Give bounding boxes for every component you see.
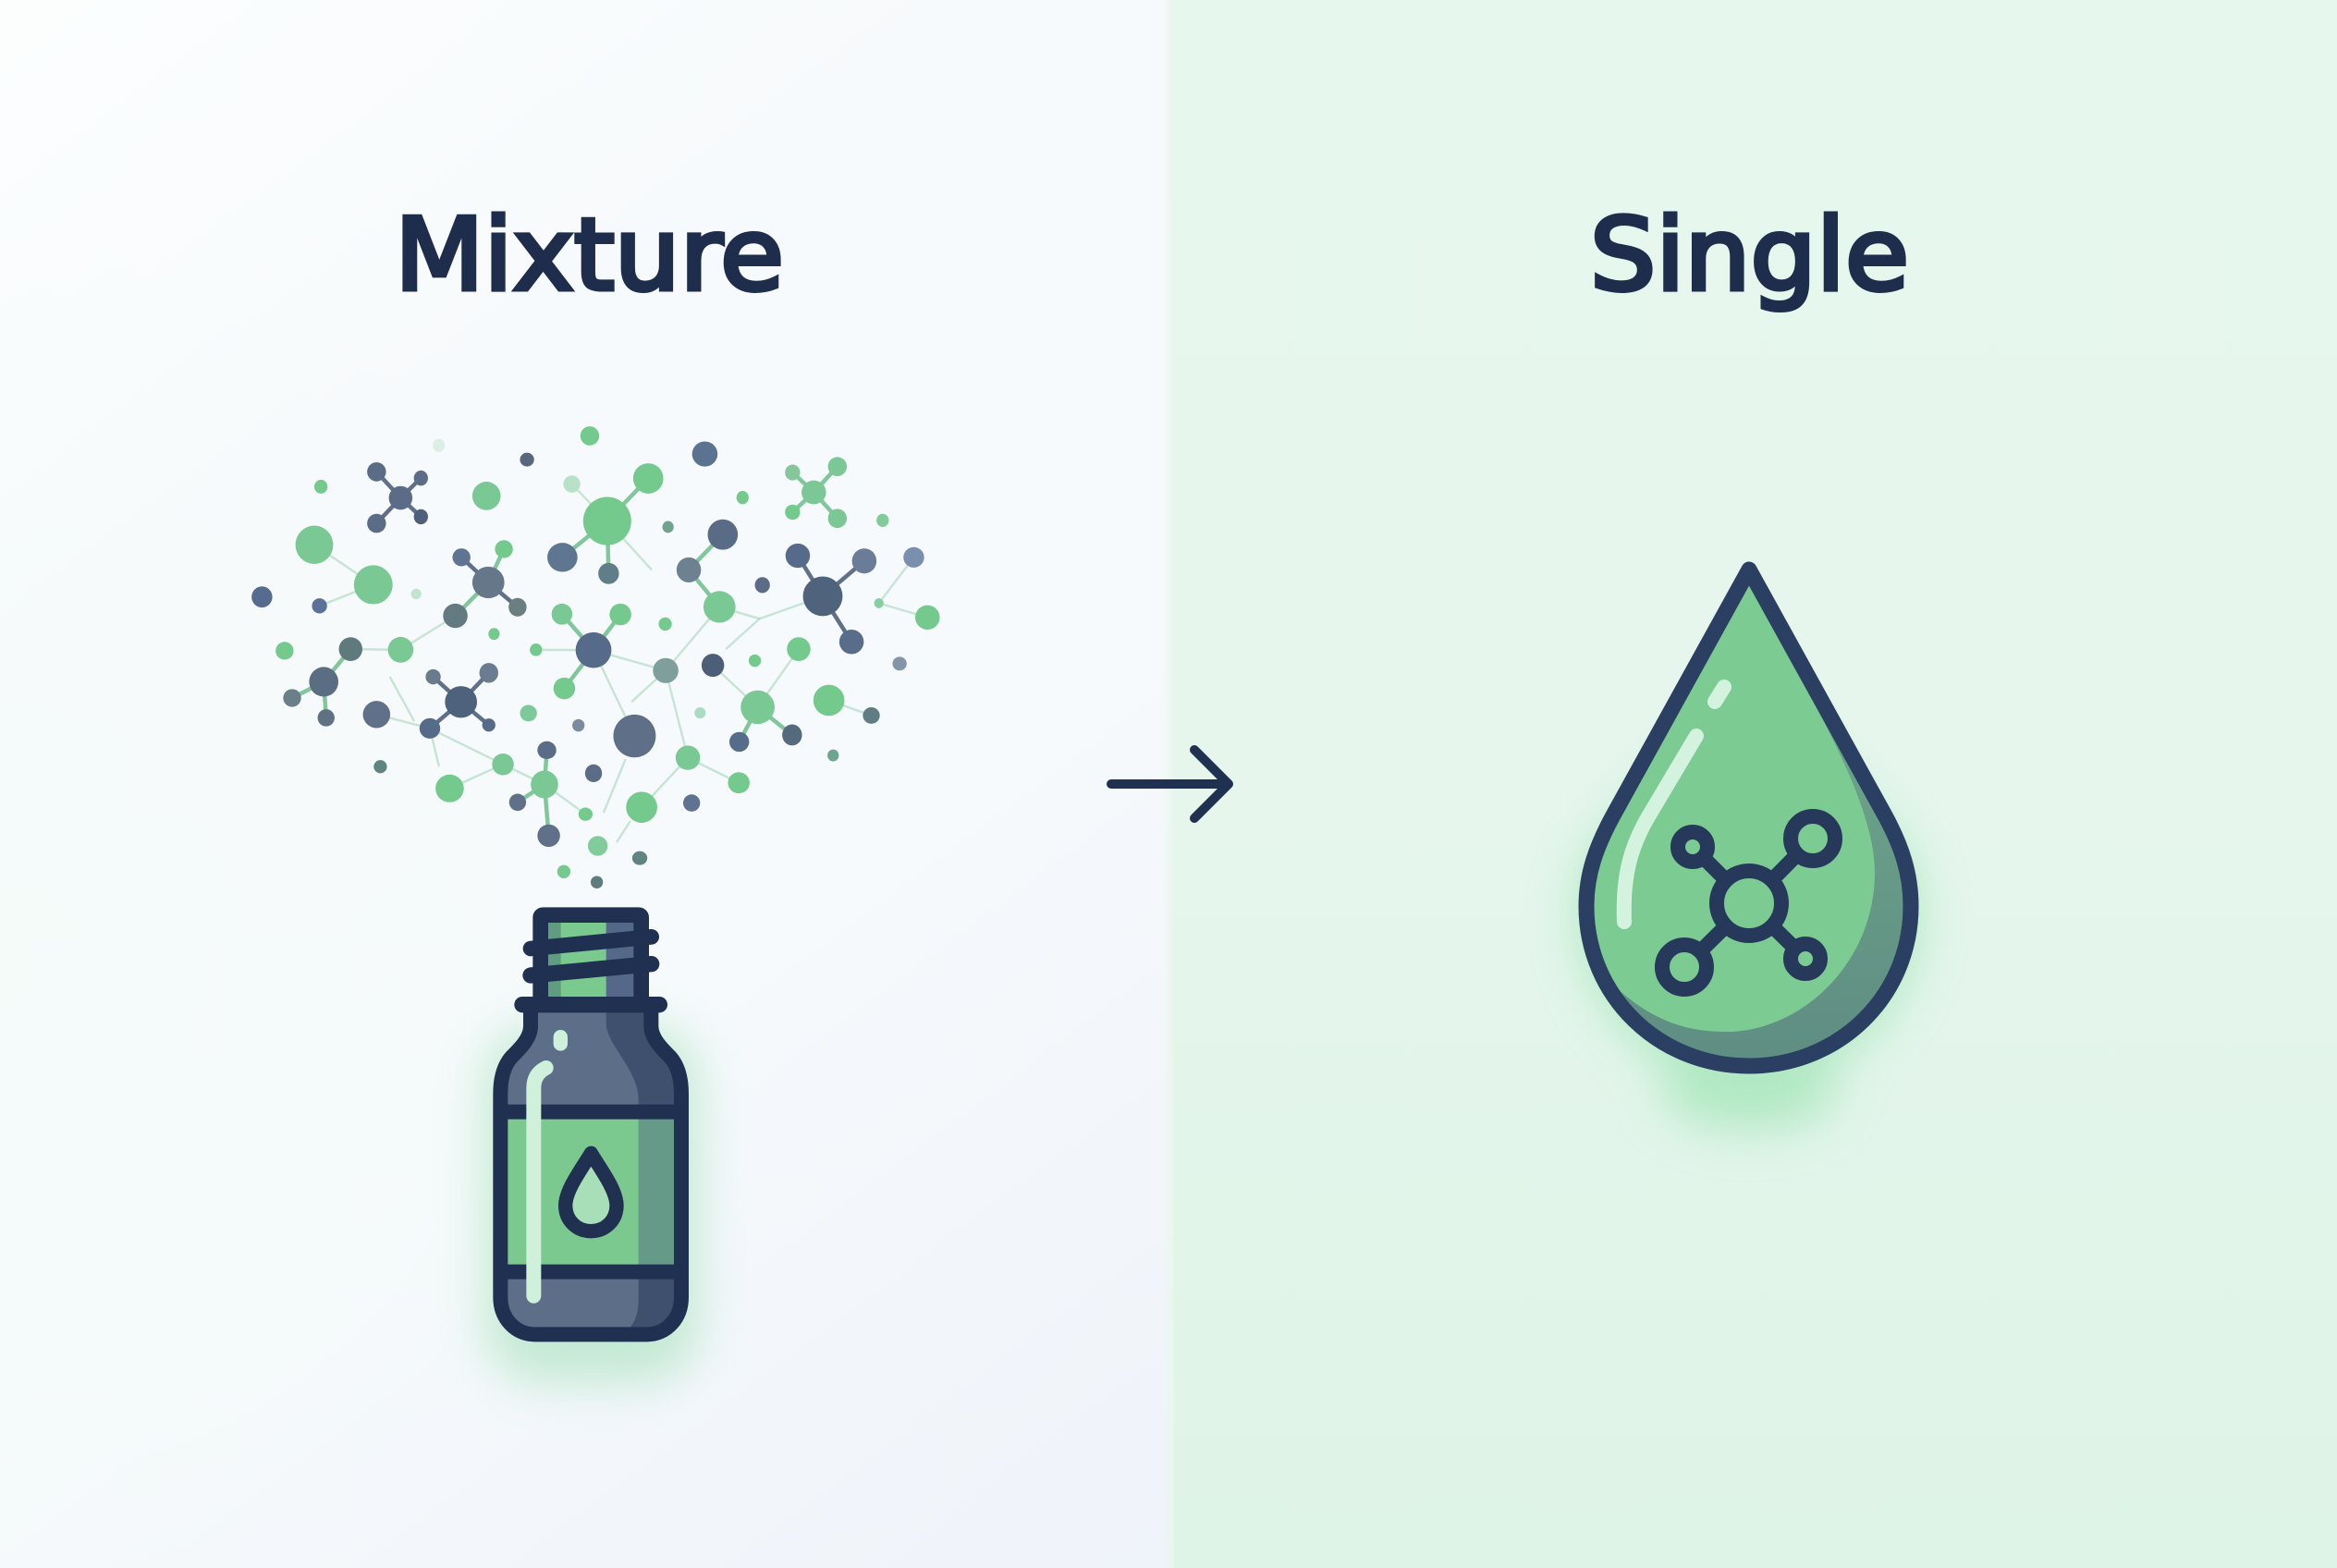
heading: Mixture: Mixture bbox=[395, 198, 784, 313]
bottle glow bbox=[485, 1026, 698, 1382]
heading: Single: Single bbox=[1590, 198, 1909, 313]
bottle body fill bbox=[508, 1012, 674, 1328]
bonds between particles bbox=[292, 467, 927, 841]
bottle highlights bbox=[533, 1037, 560, 1296]
particles: slate bbox=[251, 441, 924, 847]
particles: pale and teal bbox=[373, 439, 838, 888]
drop fill with shaded crescent bbox=[1594, 586, 1903, 1058]
panel: single background bbox=[1163, 0, 2337, 1568]
drop highlights bbox=[1624, 687, 1724, 922]
molecule cloud bbox=[251, 426, 940, 888]
drop outline bbox=[1586, 570, 1911, 1066]
bottle outline and bands bbox=[500, 1005, 681, 1334]
panel: mixture background bbox=[0, 0, 1170, 1568]
bottle threads and collar bbox=[522, 937, 659, 1005]
neck outline bbox=[541, 915, 642, 1008]
icon: essential oil bottle bbox=[493, 915, 691, 1341]
icon: molecule in drop bbox=[1662, 816, 1835, 989]
arrow bbox=[1111, 750, 1229, 818]
drop glow bbox=[1586, 703, 1911, 1130]
bottle neck glass bbox=[541, 915, 641, 1005]
icon: label drop bbox=[566, 1153, 617, 1231]
icon: large drop bbox=[1579, 562, 1919, 1074]
particles: green bbox=[275, 426, 940, 878]
